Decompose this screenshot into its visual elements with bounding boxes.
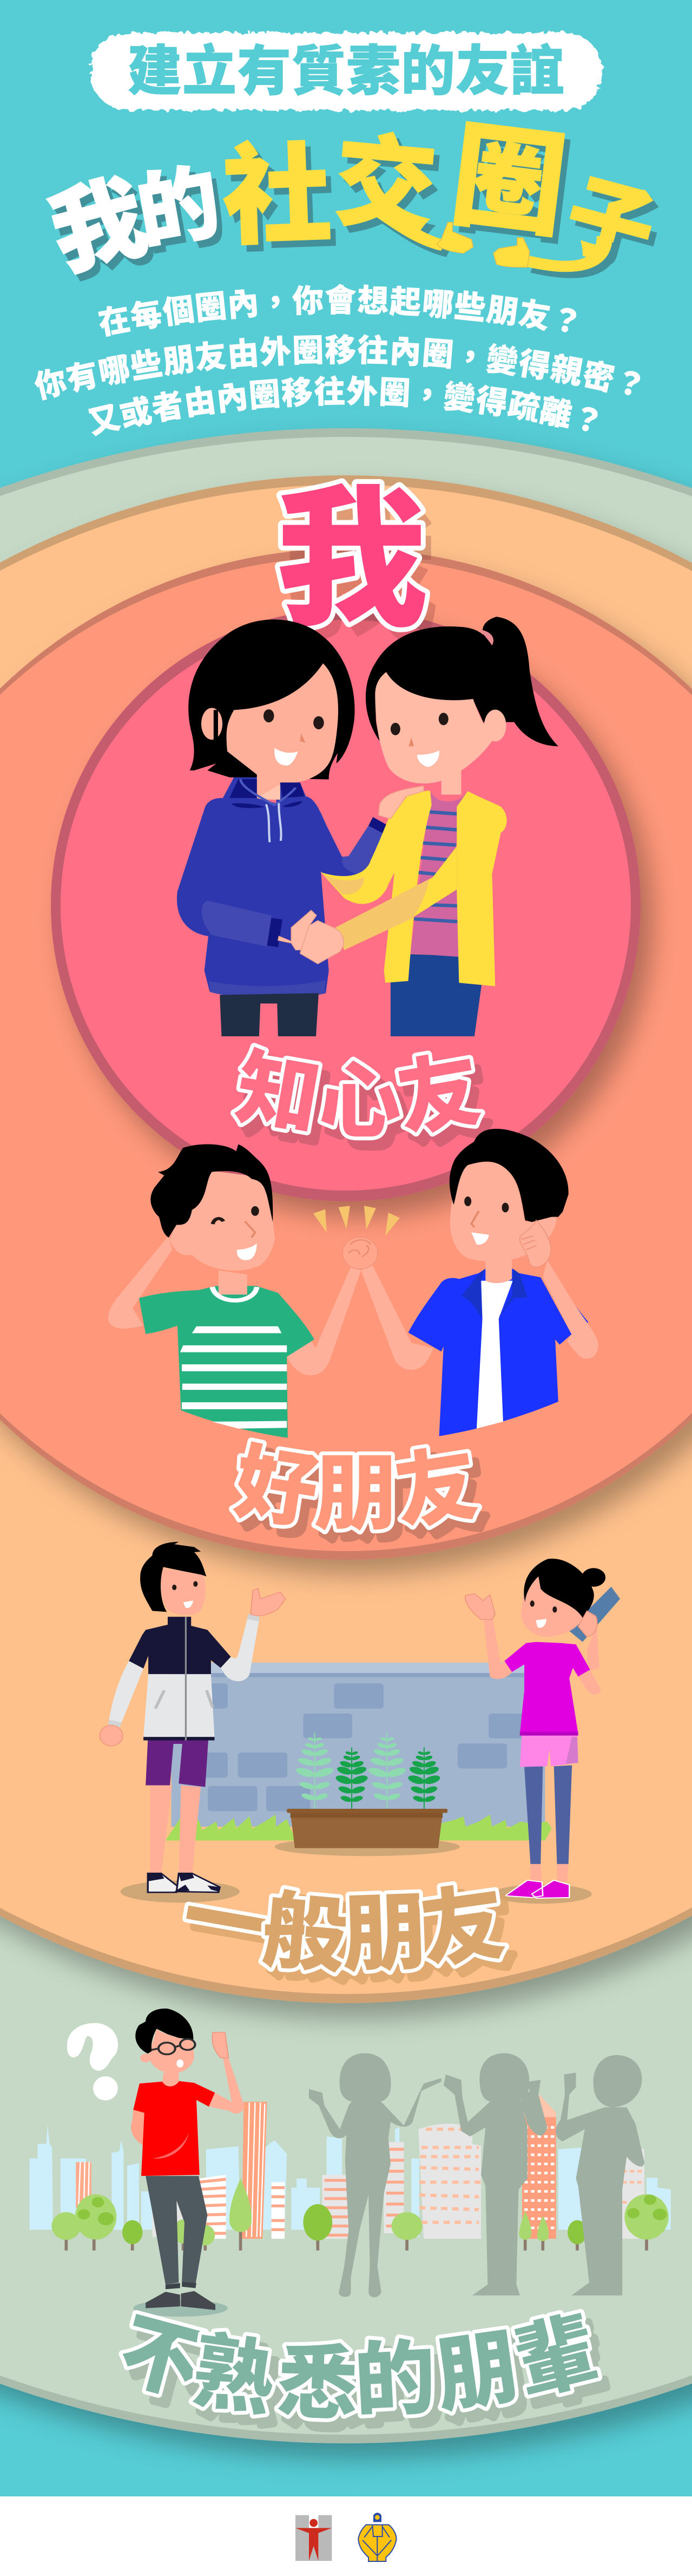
label: 好朋友: 朋 <box>314 1448 397 1540</box>
label: 一般朋友: 友 <box>423 1883 519 1987</box>
label: 一般朋友: 朋 <box>349 1894 436 1990</box>
planter <box>287 1809 447 1848</box>
main title: 我的社交圈子: 圈 <box>451 119 577 258</box>
label: 一般朋友: 友 <box>415 1875 511 1979</box>
main title: 我的社交圈子: 圈 <box>445 113 572 251</box>
label: 不熟悉的朋輩: 朋 <box>430 2321 523 2423</box>
label: 知心友: 友 <box>391 1043 488 1148</box>
intro text on arcs: 在每個圈內，你會想起哪些朋友？ <box>98 284 577 337</box>
intro text on arcs: 你有哪些朋友由外圈移往內圈，變得親密？ <box>35 334 641 401</box>
illustration: city, silhouettes and lost boy <box>30 2009 671 2317</box>
label: 不熟悉的朋輩: 的 <box>352 2332 438 2427</box>
label: 不熟悉的朋輩: 熟 <box>187 2325 280 2427</box>
woman on the phone <box>465 1559 620 1898</box>
label: 知心友: 友 <box>398 1052 496 1158</box>
label: 不熟悉的朋輩: 輩 <box>506 2303 607 2411</box>
label: 不熟悉的朋輩: 悉 <box>275 2336 360 2430</box>
main title: 我的社交圈子: 子 <box>562 172 670 287</box>
label: 一般朋友: 朋 <box>341 1886 427 1982</box>
label: 好朋友 <box>228 1436 492 1549</box>
icon: question mark <box>67 2023 118 2100</box>
trees <box>51 2179 669 2251</box>
boy with glasses and question mark <box>67 2009 244 2317</box>
shadow ellipses <box>121 1838 592 1904</box>
main title: 我的社交圈子: 社 <box>221 134 333 258</box>
label: 一般朋友: 般 <box>267 1892 359 1992</box>
main title: 我的社交圈子: 交 <box>330 125 440 245</box>
label: 不熟悉的朋輩: 悉 <box>283 2346 367 2440</box>
silhouette: right person <box>556 2055 644 2296</box>
label: 好朋友: 友 <box>397 1446 492 1549</box>
main title: 我的社交圈子: 我 <box>41 165 156 288</box>
label: 知心友: 知 <box>237 1051 334 1156</box>
boy with hoodie <box>177 619 388 1036</box>
main title: 我的社交圈子 <box>41 113 670 295</box>
intro text on arcs <box>35 284 641 436</box>
label: 好朋友: 好 <box>228 1436 324 1540</box>
label: 不熟悉的朋輩 <box>110 2303 614 2440</box>
label: 知心友 <box>229 1041 496 1158</box>
main title: 我的社交圈子: 子 <box>556 165 664 281</box>
label: 一般朋友: 一 <box>184 1877 282 1984</box>
title pill: 建立有質素的友誼 <box>128 41 565 102</box>
boy in green striped shirt <box>108 1145 361 1438</box>
label: 一般朋友: 般 <box>259 1884 351 1984</box>
intro text on arcs: 又或者由內圈移往外圈，變得疏離？ <box>88 375 598 436</box>
main title: 我的社交圈子: 的 <box>136 162 232 266</box>
panel: pink circle, close friends <box>51 609 641 1201</box>
label: 不熟悉的朋輩: 朋 <box>438 2331 531 2433</box>
label: 不熟悉的朋輩: 不 <box>110 2303 212 2412</box>
label: 知心友: 心 <box>319 1056 401 1148</box>
label: 一般朋友: 一 <box>176 1869 274 1976</box>
illustration: close friends shaking hands <box>177 617 558 1036</box>
logo: yellow hands <box>358 2513 397 2561</box>
label: 不熟悉的朋輩: 輩 <box>513 2313 614 2421</box>
footer band <box>0 2496 692 2576</box>
girl with yellow cardigan <box>321 617 558 1036</box>
man in navy and white jacket <box>100 1542 286 1892</box>
label: 知心友: 心 <box>326 1066 408 1158</box>
grass <box>166 1815 552 1841</box>
label: 好朋友: 好 <box>236 1444 331 1548</box>
icon: handshake <box>278 786 424 964</box>
title pill <box>90 32 602 110</box>
boy in blue shirt <box>361 1129 598 1436</box>
illustration: good friends high five <box>108 1129 598 1438</box>
icon: sparks <box>313 1206 400 1236</box>
logo: Hong Kong government department <box>295 2515 332 2561</box>
label: 不熟悉的朋輩: 不 <box>118 2313 220 2422</box>
main title: 我的社交圈子: 我 <box>46 171 162 295</box>
plants <box>294 1733 441 1809</box>
main title: 我的社交圈子: 社 <box>226 140 339 265</box>
label: 不熟悉的朋輩: 熟 <box>195 2335 288 2436</box>
panel: orange ring, ordinary friends <box>0 475 692 2003</box>
silhouette: woman <box>309 2053 441 2297</box>
main title: 我的社交圈子: 交 <box>335 132 446 252</box>
label: 一般朋友 <box>176 1869 519 1992</box>
panel: salmon ring, good friends <box>0 548 692 1560</box>
label: 好朋友: 朋 <box>322 1457 404 1549</box>
label: 好朋友: 友 <box>389 1437 484 1541</box>
heading: 我: 我 <box>276 476 427 645</box>
label: 不熟悉的朋輩: 的 <box>360 2342 445 2437</box>
label: 知心友: 知 <box>229 1041 327 1146</box>
heading: 我: 我 <box>285 488 436 657</box>
brick wall <box>171 1663 545 1827</box>
panel: outer ring, unfamiliar acquaintances <box>0 428 692 2443</box>
icon: handshake arms on title <box>380 211 610 272</box>
silhouette: three groups of unfamiliar people <box>309 2053 644 2297</box>
main title: 我的社交圈子: 的 <box>131 155 226 259</box>
illustration: ordinary friends with wall <box>100 1542 620 1904</box>
silhouette: middle person <box>444 2053 547 2296</box>
icon: clasped fists <box>342 1237 378 1269</box>
city skyline <box>30 2095 671 2239</box>
